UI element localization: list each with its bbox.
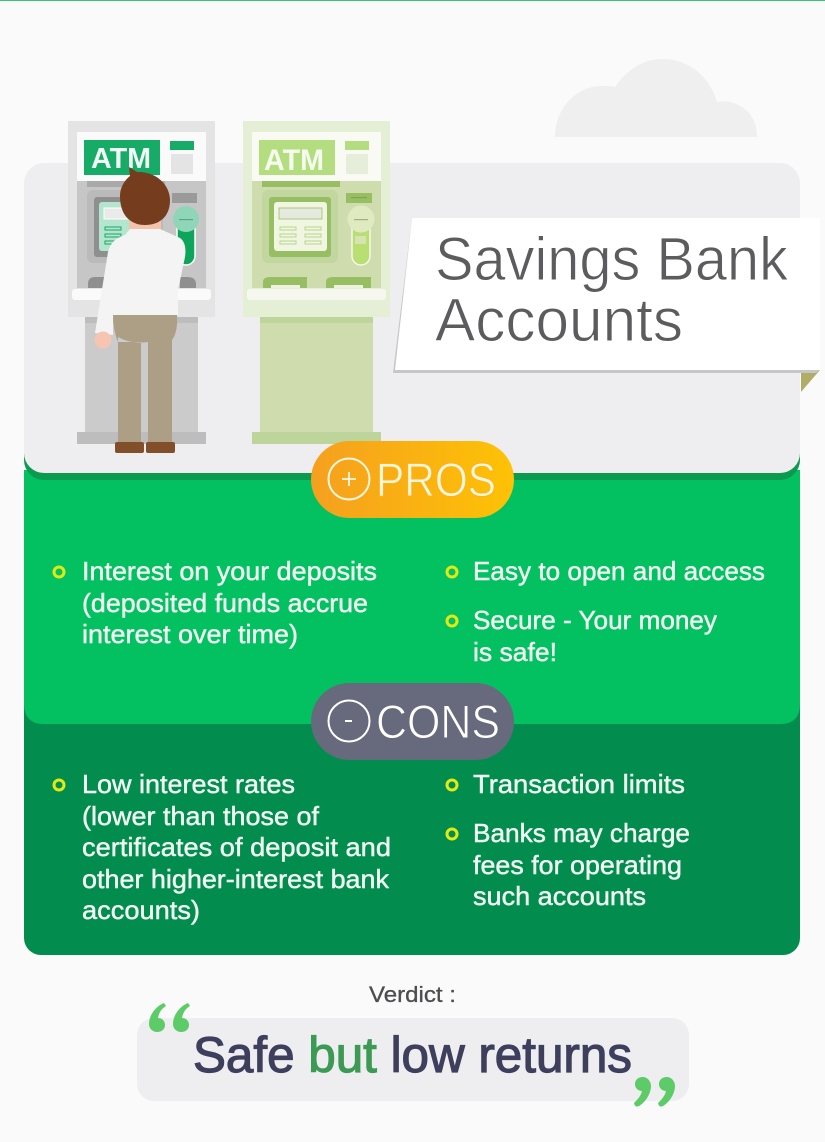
pros list left: (deposited funds accrue xyxy=(82,588,368,618)
illustration: green ATM xyxy=(243,121,390,444)
cons list left: certificates of deposit and xyxy=(82,832,391,862)
badge: cons xyxy=(311,683,514,760)
panel: cons xyxy=(24,680,800,955)
cons list right: Transaction limits xyxy=(473,769,685,799)
illustration: grey ATM: ATM xyxy=(91,143,151,175)
pros list right: Easy to open and access xyxy=(473,556,765,586)
cons list right xyxy=(447,769,690,911)
cons list right: fees for operating xyxy=(473,850,682,880)
panel: header xyxy=(24,163,800,480)
pros list right xyxy=(447,556,765,667)
title: Savings Bank xyxy=(435,225,788,293)
illustration: green ATM: ATM xyxy=(264,144,324,177)
pros list right: Secure - Your money xyxy=(473,605,717,635)
illustration: grey ATM xyxy=(68,121,215,444)
title: Accounts xyxy=(435,286,683,354)
badge: pros xyxy=(311,441,514,518)
cons list right: such accounts xyxy=(473,881,646,911)
verdict text: Safe but low returns xyxy=(193,1027,632,1083)
cons list left: (lower than those of xyxy=(82,801,320,831)
cons list left: other higher-interest bank xyxy=(82,864,390,894)
badge: pros: PROS xyxy=(376,453,496,506)
cons list right: Banks may charge xyxy=(473,818,690,848)
pros list right: is safe! xyxy=(473,637,557,667)
illustration: man from behind xyxy=(94,167,185,453)
title banner xyxy=(393,218,820,392)
icon: closing quote xyxy=(634,1077,675,1107)
verdict box xyxy=(137,1018,689,1101)
cons list left xyxy=(54,769,391,925)
cons list left: Low interest rates xyxy=(82,769,295,799)
pros list left: interest over time) xyxy=(82,619,298,649)
icon: cloud xyxy=(555,59,757,137)
badge: cons: CONS xyxy=(376,695,500,748)
icon: opening quote xyxy=(149,1003,190,1032)
verdict label: Verdict : xyxy=(369,982,456,1007)
pros list left: Interest on your deposits xyxy=(82,556,377,586)
pros list left xyxy=(54,556,377,649)
panel: pros xyxy=(24,470,800,724)
cons list left: accounts) xyxy=(82,895,200,925)
